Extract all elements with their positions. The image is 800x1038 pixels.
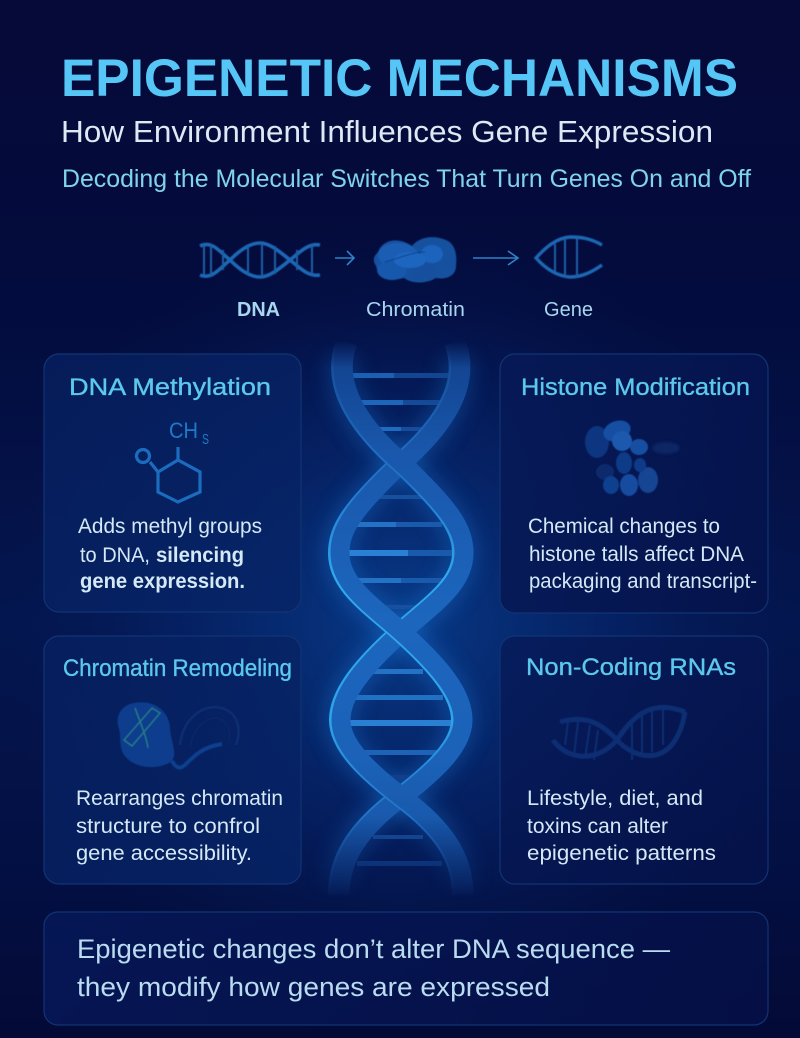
text: remodeling description: gene accessibility.: [76, 842, 252, 865]
callout text: they modify how genes are expressed: [77, 972, 550, 1002]
arrow: DNA to chromatin: [335, 251, 354, 265]
title: EPIGENETIC MECHANISMS: [61, 49, 738, 108]
base pair rungs: [347, 373, 453, 866]
label: Gene: Gene: [544, 299, 593, 321]
text: remodeling description: structure to confrol: [76, 815, 260, 838]
icon: gene segment: [536, 237, 602, 277]
arrow: chromatin to gene: [473, 251, 518, 265]
text: methylation description: silencing: [156, 544, 244, 567]
icon: remodeling chromatin: [118, 702, 238, 768]
icon: methyl group molecule: S: [202, 431, 209, 448]
label: DNA: DNA: [237, 299, 280, 321]
label: Chromatin: Chromatin: [366, 299, 465, 321]
icon: methyl group molecule: CH: [169, 418, 198, 443]
heading: DNA Methylation: DNA Methylation: [69, 374, 271, 401]
text: RNA description: [527, 787, 716, 865]
text: histone description: histone talls affect DNA: [529, 543, 744, 566]
heading: Chromatin Remodeling: Chromatin Remodeling: [63, 655, 292, 682]
text: RNA description: toxins can alter: [527, 815, 668, 838]
text: histone description: [528, 515, 757, 593]
text: methylation description: to DNA,: [80, 544, 150, 567]
tagline: Decoding the Molecular Switches That Turn Genes On and Off: [62, 165, 751, 193]
panel: Histone Modification: [500, 354, 768, 613]
subtitle: How Environment Influences Gene Expression: [61, 114, 713, 149]
back strand segments: [338, 342, 464, 895]
icon: methyl group molecule: [136, 418, 209, 502]
central DNA double helix: [338, 342, 464, 895]
text: methylation description: Adds methyl groups: [78, 515, 262, 538]
text: histone description: packaging and transcript-: [529, 570, 757, 593]
callout text: Epigenetic changes don’t alter DNA sequence —: [77, 934, 670, 964]
icon: histone cluster: [585, 417, 680, 496]
heading: Histone Modification: Histone Modification: [521, 374, 750, 401]
icon: DNA double helix: [200, 243, 320, 277]
icon: faint RNA helix: [553, 706, 685, 760]
front strand segments: [338, 342, 464, 895]
icon: chromatin cluster: [374, 237, 456, 282]
text: methylation description: [78, 515, 262, 593]
text: methylation description: gene expression.: [80, 570, 245, 593]
text: RNA description: epigenetic patterns: [527, 842, 716, 865]
callout text: [77, 934, 670, 1002]
pathway diagram: DNA to chromatin to gene: [200, 237, 602, 321]
heading: Non-Coding RNAs: Non-Coding RNAs: [526, 654, 736, 681]
text: RNA description: Lifestyle, diet, and: [527, 787, 703, 810]
text: histone description: Chemical changes to: [528, 515, 720, 538]
text: remodeling description: Rearranges chromatin: [76, 787, 283, 810]
panel: Non-Coding RNAs: [500, 636, 768, 884]
panel: Chromatin Remodeling: [44, 636, 301, 884]
callout: key takeaway banner: [44, 912, 768, 1025]
panel: DNA Methylation: [44, 354, 301, 612]
text: remodeling description: [76, 787, 283, 865]
